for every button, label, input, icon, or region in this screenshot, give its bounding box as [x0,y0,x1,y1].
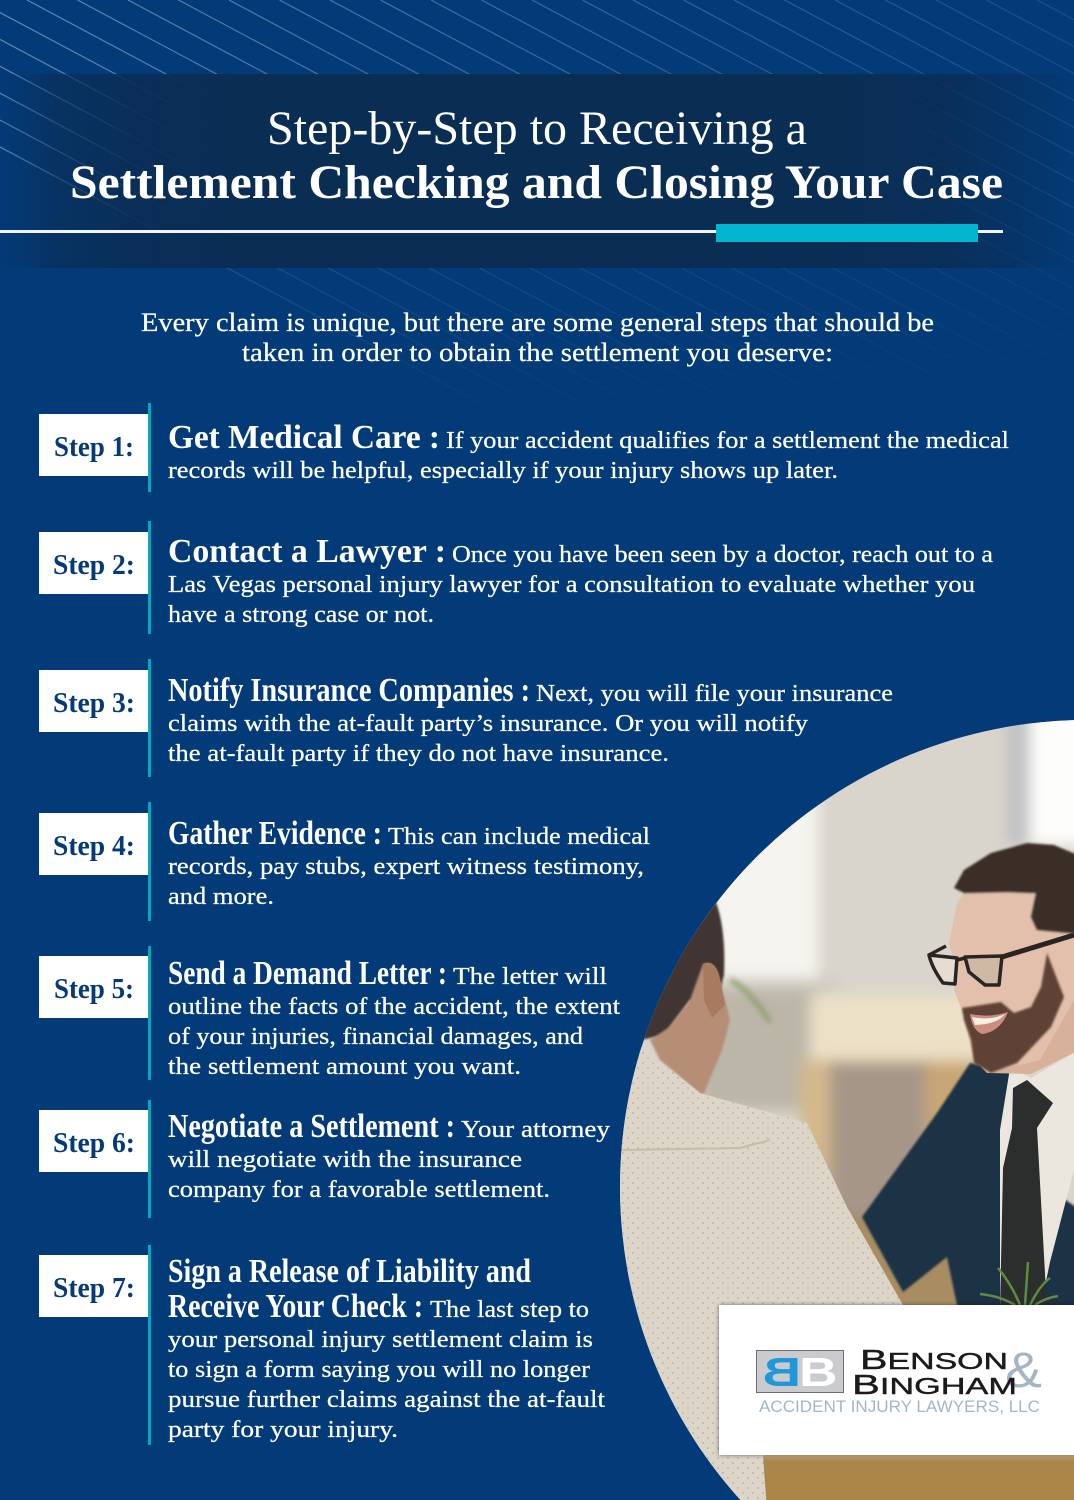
step 7: Sign a Release of Liability and [168,1253,531,1290]
title line 1: Step-by-Step to Receiving a [267,102,807,155]
photo: two men at desk in circular crop [600,700,1074,1500]
title rule [0,230,1003,233]
step 5 [39,946,620,1080]
step 7: Receive Your Check : [168,1288,423,1325]
logo mark: B [763,1350,801,1395]
step 6: Negotiate a Settlement : [168,1108,455,1145]
lawyer face [949,892,1074,1073]
lawyer teeth [972,1014,1005,1025]
step 1: Step 1: [54,432,134,463]
plant [980,1262,1058,1305]
desk [750,1456,1074,1500]
client hair [640,902,724,1040]
client ear [703,963,725,1018]
logo mark [756,1350,844,1395]
step 2: Contact a Lawyer : [168,533,446,570]
title line 2: Settlement Checking and Closing Your Case [70,156,1003,209]
logo wordmark: B ENSON [860,1344,1008,1375]
step 7: The last step to [430,1296,589,1323]
step 2: Once you have been seen by a doctor, reach out to a [452,541,993,568]
step 6: Step 6: [53,1128,135,1159]
step 6 [39,1100,611,1218]
step 6: will negotiate with the insurance [168,1146,522,1173]
step 5: the settlement amount you want. [168,1053,521,1080]
step 3: the at-fault party if they do not have insurance. [168,740,669,767]
logo wordmark: B INGHAM [852,1369,1017,1400]
step 7: your personal injury settlement claim is [168,1326,593,1353]
step 4: This can include medical [388,823,650,850]
logo wordmark [759,1342,1042,1416]
step 3 [39,659,893,777]
step 1 [39,403,1009,492]
step 1: Get Medical Care : [168,419,440,456]
step 2: Step 2: [53,550,135,581]
step 5: outline the facts of the accident, the extent [168,993,620,1020]
lawyer hair [954,843,1074,935]
step 4 [39,802,650,921]
step 7 [39,1245,605,1445]
lawyer beard [962,953,1064,1073]
step 7: party for your injury. [168,1416,398,1443]
logo wordmark: & [1005,1342,1042,1398]
step 7: pursue further claims against the at-fault [168,1386,605,1413]
step 3: Notify Insurance Companies : [168,672,530,709]
intro text: Every claim is unique, but there are some general steps that should be [141,308,934,337]
step 4: and more. [168,883,274,910]
step 2: Las Vegas personal injury lawyer for a consultation to evaluate whether you [168,571,975,598]
step 3: Next, you will file your insurance [536,680,893,707]
client neck [650,963,730,1096]
lawyer glasses [929,935,1074,985]
step 2: have a strong case or not. [168,601,434,628]
step 6: company for a favorable settlement. [168,1176,550,1203]
step 4: Step 4: [53,831,135,862]
diagonal stripes [0,0,1074,374]
lawyer shirt [1000,1043,1074,1310]
intro text [141,308,934,367]
client shirt [600,1046,903,1500]
step 5: of your injuries, financial damages, and [168,1023,583,1050]
step 7: to sign a form saying you will no longer [168,1356,590,1383]
step 4: records, pay stubs, expert witness testimony, [168,853,644,880]
logo panel [719,1305,1074,1455]
logo mark: B [799,1350,837,1395]
lawyer suit [862,1063,1074,1310]
step 3: claims with the at-fault party’s insurance. Or you will notify [168,710,809,737]
lawyer neck [987,1000,1074,1074]
step 1: records will be helpful, especially if your injury shows up later. [168,457,838,484]
step 1: If your accident qualifies for a settlement the medical [446,427,1009,454]
step 5: Step 5: [54,974,134,1005]
step 4: Gather Evidence : [168,815,382,852]
title band [0,74,1074,268]
intro text: taken in order to obtain the settlement you deserve: [242,338,833,367]
step 6: Your attorney [461,1116,611,1143]
step 5: The letter will [453,963,607,990]
lawyer tie [1000,1080,1053,1310]
lawyer smile [970,1012,1008,1034]
step 7: Step 7: [53,1273,135,1304]
step 2 [39,521,993,634]
teal accent [716,224,978,242]
logo wordmark: ACCIDENT INJURY LAWYERS, LLC [759,1398,1040,1416]
step 5: Send a Demand Letter : [168,955,447,992]
step 3: Step 3: [53,688,135,719]
background plant [730,980,770,1022]
